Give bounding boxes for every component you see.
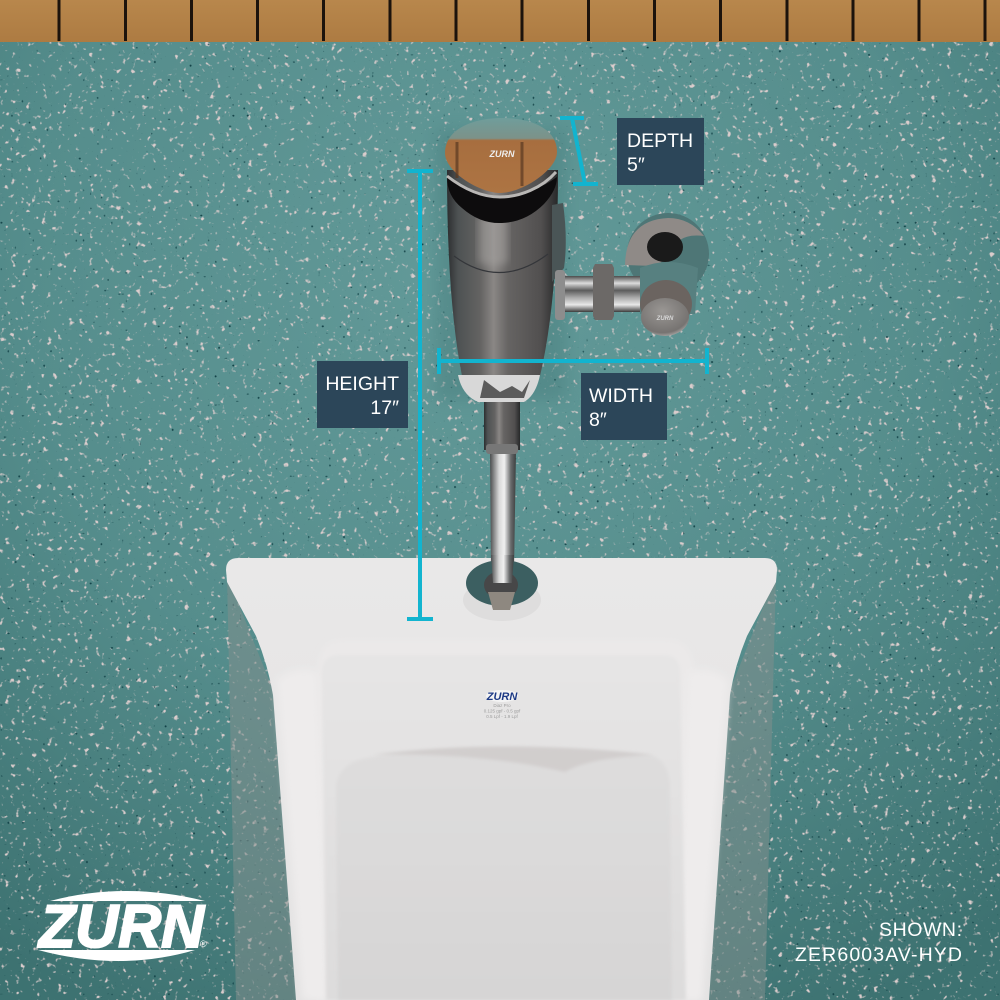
height line: [407, 171, 433, 619]
dark pipe: [484, 402, 520, 450]
label small print: Diaz Pro: [493, 703, 511, 708]
label small print: 0.125 gpf - 0.5 gpf: [484, 708, 521, 714]
height label: 17″: [370, 397, 399, 419]
wood slat ceiling: [0, 0, 1000, 42]
urinal outer shell: [226, 558, 777, 1000]
depth label: 5″: [627, 154, 645, 176]
wall escutcheon: [627, 213, 709, 295]
logo wordmark: ZURN: [37, 893, 206, 960]
hex nut: [593, 264, 614, 320]
shown model caption: [795, 919, 962, 966]
stop body: [640, 262, 698, 314]
height label: [317, 361, 408, 428]
width label: [581, 373, 667, 440]
stop valve and supply arm: [555, 213, 709, 336]
logo arcs: [38, 891, 205, 961]
bottom collar: [458, 375, 540, 402]
shown model caption: SHOWN:: [879, 919, 962, 941]
stop knob cap: ZURN: [656, 316, 674, 322]
pipe coupling: [486, 444, 518, 454]
valve cylinder body: [447, 170, 558, 376]
top cap: [445, 118, 557, 197]
chrome pipe: [490, 450, 516, 570]
registered mark: ®: [200, 939, 207, 949]
stop knob cap: [641, 298, 689, 336]
side button housing: [552, 203, 566, 282]
Zurn logo: [37, 891, 207, 961]
cap logo: ZURN: [488, 149, 515, 159]
arm end flange: [555, 270, 565, 320]
stop knob collar: [640, 280, 692, 328]
sensor window: [447, 177, 557, 223]
urinal rim: [312, 640, 700, 1000]
label logo: ZURN: [486, 691, 518, 703]
dimension: height: [317, 171, 433, 619]
collar shadow pattern: [480, 380, 530, 398]
urinal side shadows: [227, 575, 776, 1000]
urinal side rim highlights: [277, 670, 728, 1000]
body seam: [454, 254, 548, 273]
flush valve: [436, 118, 566, 570]
floor flange: [463, 555, 541, 621]
body highlight: [478, 215, 508, 266]
urinal basin: [336, 748, 672, 1000]
label small print: 0.5 Lpf - 1.9 Lpf: [486, 714, 519, 719]
height label: HEIGHT: [325, 373, 399, 395]
basin lip shadow: [372, 746, 654, 772]
urinal inner face: [322, 655, 686, 1000]
depth label: DEPTH: [627, 130, 693, 152]
width label: WIDTH: [589, 385, 653, 407]
shown model caption: ZER6003AV-HYD: [795, 944, 962, 966]
valve soft shadow: [436, 130, 566, 400]
dimension: depth: [560, 118, 704, 185]
width line: [439, 348, 707, 374]
urinal label: [484, 690, 521, 719]
urinal: [226, 558, 777, 1000]
horizontal arm: [558, 276, 640, 312]
depth line: [560, 118, 598, 184]
depth label: [617, 118, 704, 185]
width label: 8″: [589, 409, 607, 431]
dimension: width: [439, 348, 707, 440]
